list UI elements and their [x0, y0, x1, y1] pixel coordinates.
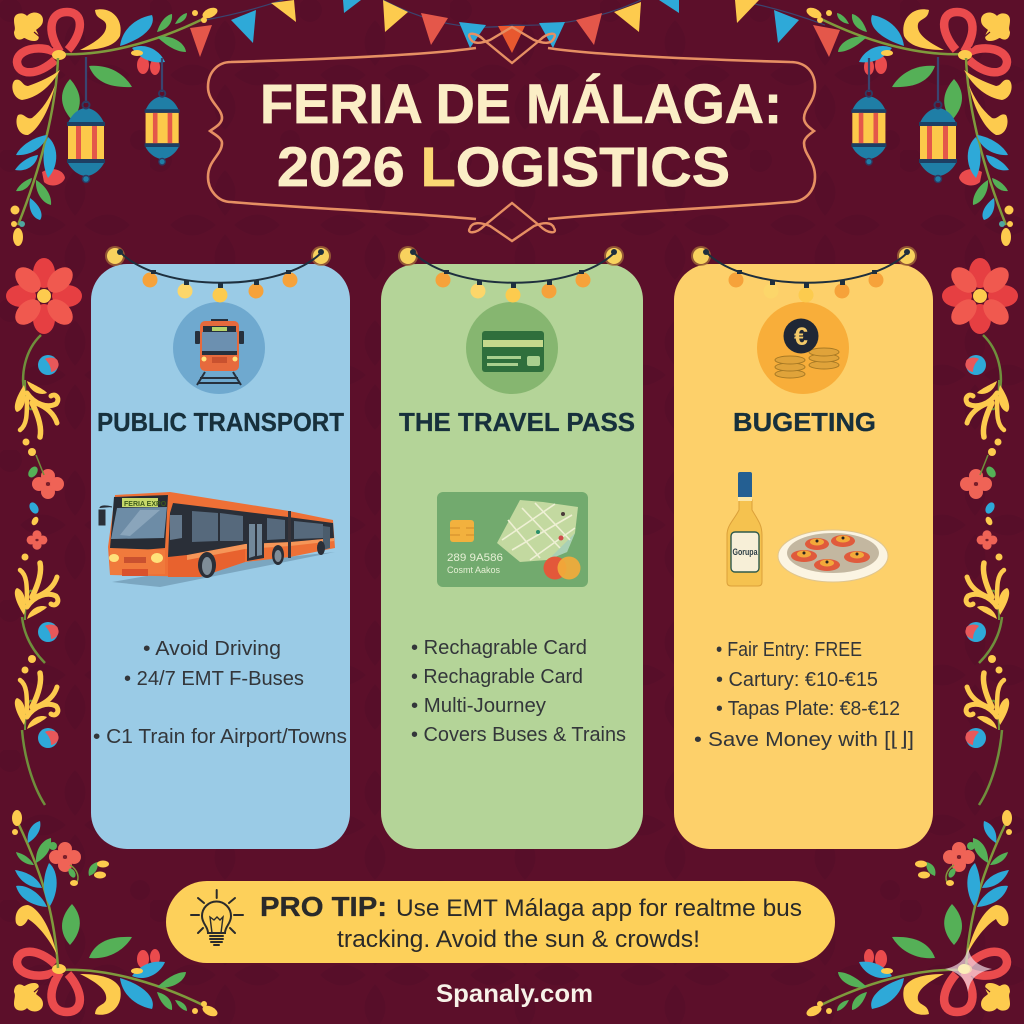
pro tip banner — [166, 881, 835, 963]
floral corner: bottom right — [805, 810, 1012, 1018]
icon: euro coins: € — [794, 323, 808, 351]
heading: PUBLIC TRANSPORT — [97, 407, 344, 437]
banner frame — [208, 48, 815, 219]
sparkle watermark — [945, 947, 992, 992]
title line 2: 2026 LOGISTICS — [277, 135, 730, 198]
string lights: travel pass — [398, 246, 624, 302]
bullet list — [411, 637, 626, 746]
illustration: travel card with map — [437, 492, 588, 587]
tip line 1: Use EMT Málaga app for realtme bus — [396, 895, 802, 922]
bullet list: • 24/7 EMT F-Buses — [124, 668, 304, 690]
bullet list: • Rechagrable Card — [411, 637, 587, 659]
lanterns right — [851, 57, 957, 182]
panel: budgeting — [674, 264, 933, 849]
panel: the travel pass — [381, 264, 643, 849]
bottom ornament — [469, 203, 555, 241]
pill background — [166, 881, 835, 963]
heading: BUGETING — [733, 407, 876, 437]
bullet list: • Fair Entry: FREE — [716, 639, 862, 661]
bullet list: • Tapas Plate: €8-€12 — [716, 698, 900, 720]
icon: card — [466, 302, 558, 394]
floral corner: top left — [10, 6, 219, 246]
bunting flags — [190, 0, 840, 57]
bullet list: • Multi-Journey — [411, 695, 546, 717]
bullet list: • Covers Buses & Trains — [411, 724, 626, 746]
string lights: transport — [105, 246, 331, 302]
illustration: drink bottle: Gorupa — [732, 547, 758, 557]
top ornament — [469, 27, 555, 63]
tip line 1: PRO TIP: — [260, 891, 387, 922]
illustration: drink bottle — [727, 472, 762, 586]
bullet list: • Cartury: €10-€15 — [716, 669, 878, 691]
illustration: travel card with map: 289 9A586 — [447, 552, 503, 564]
bullet list: • Save Money with [⌊⌋] — [694, 729, 914, 751]
tip line 2: tracking. Avoid the sun & crowds! — [337, 926, 700, 953]
bullet list — [694, 639, 914, 751]
lanterns left — [67, 57, 180, 182]
bullet list: • Rechagrable Card — [411, 666, 583, 688]
bullet list: • C1 Train for Airport/Towns — [93, 726, 347, 748]
illustration: articulated bus: FERIA EXPO — [124, 501, 167, 508]
panel background — [381, 264, 643, 849]
panel background — [91, 264, 350, 849]
icon: train bus — [173, 302, 265, 394]
floral corner: top right — [805, 6, 1014, 246]
title banner — [208, 27, 815, 241]
icon: euro coins — [757, 302, 849, 394]
heading: THE TRAVEL PASS — [399, 407, 635, 437]
illustration: travel card with map: Cosmt Aakos — [447, 565, 500, 575]
title line 1: FERIA DE MÁLAGA: — [260, 72, 782, 135]
floral side strip: left — [6, 258, 82, 805]
panel background — [674, 264, 933, 849]
illustration: articulated bus — [99, 492, 335, 587]
bullet list — [93, 638, 347, 748]
floral side strip: right — [942, 258, 1018, 805]
footer website: Spanaly.com — [436, 980, 593, 1008]
illustration: tapas plate — [778, 530, 888, 582]
bullet list: • Avoid Driving — [143, 638, 281, 660]
panel: public transport — [91, 264, 350, 849]
floral corner: bottom left — [12, 810, 219, 1018]
icon: light bulb — [191, 890, 243, 945]
string lights: budgeting — [691, 246, 917, 302]
